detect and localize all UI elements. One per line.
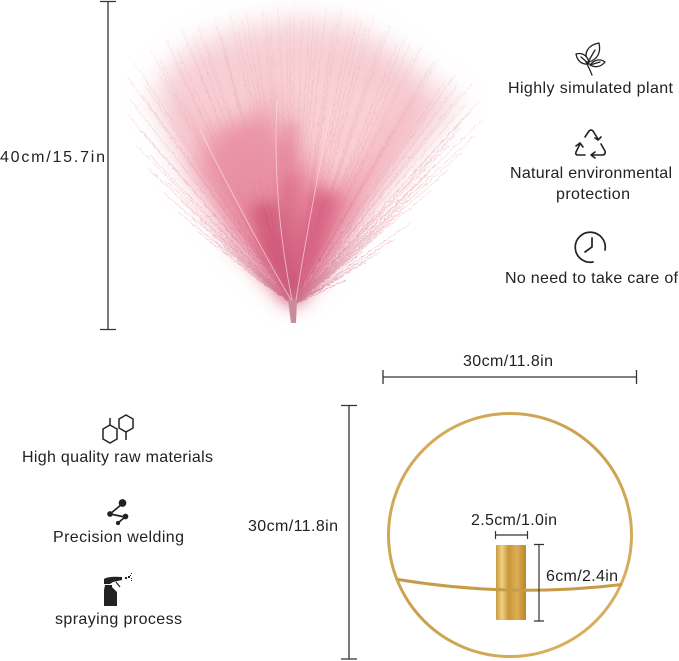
icon: welding joints bbox=[108, 500, 128, 524]
label: natural environmental: Natural environmental bbox=[510, 165, 672, 182]
icon: clock bbox=[575, 232, 605, 262]
feature: natural environmental protection bbox=[510, 130, 672, 203]
icon: molecule hexagons bbox=[103, 415, 133, 443]
icon: leaves bbox=[576, 43, 605, 75]
candle cup bbox=[496, 545, 526, 620]
icon: recycle arrows bbox=[576, 130, 605, 158]
plume spines bbox=[200, 100, 333, 300]
icon: spray bottle bbox=[104, 573, 132, 606]
gold ring holder bbox=[388, 414, 632, 656]
curved shelf bar bbox=[398, 580, 622, 590]
label: no need to take care of: No need to take care of bbox=[505, 270, 679, 287]
plume stem bbox=[288, 300, 297, 323]
label: protection: protection bbox=[556, 186, 630, 203]
feature: highly simulated plant bbox=[508, 43, 674, 97]
feature: high quality raw materials bbox=[22, 415, 213, 466]
dimension: ring width bbox=[383, 353, 636, 384]
feature: spraying process bbox=[55, 573, 182, 628]
label: ring height: 30cm/11.8in bbox=[248, 518, 338, 535]
dimension: plume height bbox=[0, 2, 116, 330]
feature: precision welding bbox=[53, 500, 184, 546]
label: spraying process: spraying process bbox=[55, 611, 182, 628]
label: highly simulated plant: Highly simulated plant bbox=[508, 80, 674, 97]
dimension: cup width bbox=[471, 512, 557, 539]
label: ring width: 30cm/11.8in bbox=[463, 353, 553, 370]
dimension: cup height bbox=[534, 544, 618, 621]
label: cup height: 6cm/2.4in bbox=[546, 568, 618, 585]
plume radial hairs bbox=[128, 4, 484, 305]
label: plume height: 40cm/15.7in bbox=[0, 149, 105, 166]
label: high quality raw materials: High quality raw materials bbox=[22, 449, 213, 466]
label: cup width: 2.5cm/1.0in bbox=[471, 512, 557, 529]
pink pampas plume bbox=[128, 4, 484, 323]
feature: no need to take care of bbox=[505, 232, 679, 287]
dimension: ring height bbox=[248, 406, 357, 659]
label: precision welding: Precision welding bbox=[53, 529, 184, 546]
